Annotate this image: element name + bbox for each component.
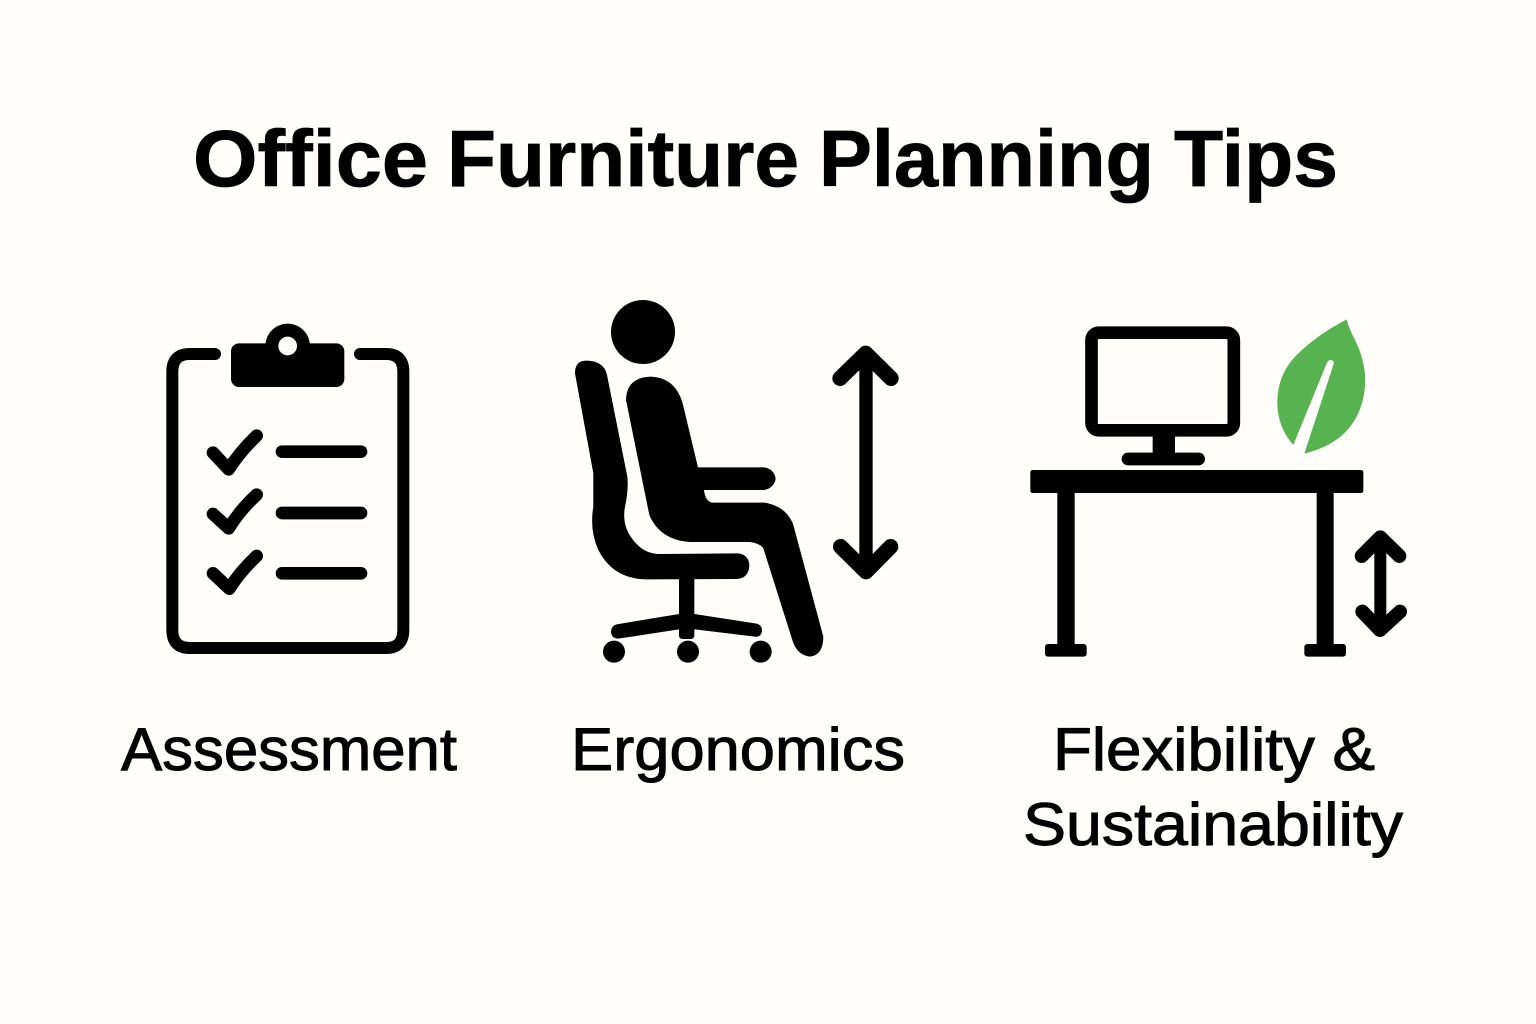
- icon: green leaf: [1277, 319, 1365, 454]
- label: Flexibility & Sustainability: [1023, 716, 1403, 858]
- title: Office: [193, 114, 428, 203]
- label: Flexibility & Sustainability: Flexibility &: [1053, 716, 1375, 783]
- title: Tips: [1174, 114, 1338, 203]
- label: Flexibility & Sustainability: Sustainability: [1023, 791, 1403, 858]
- title: Furniture: [447, 114, 799, 203]
- title: Planning: [819, 114, 1154, 203]
- icon: clipboard checklist: [172, 324, 403, 648]
- icon: seated person on office chair: [575, 300, 823, 663]
- label: Ergonomics: Ergonomics: [571, 716, 905, 783]
- title: [193, 114, 1338, 203]
- icon: desk with monitor: [1030, 333, 1363, 657]
- label: Assessment: Assessment: [121, 716, 457, 783]
- arrow: chair height: [840, 353, 891, 572]
- arrow: desk height: [1362, 537, 1400, 630]
